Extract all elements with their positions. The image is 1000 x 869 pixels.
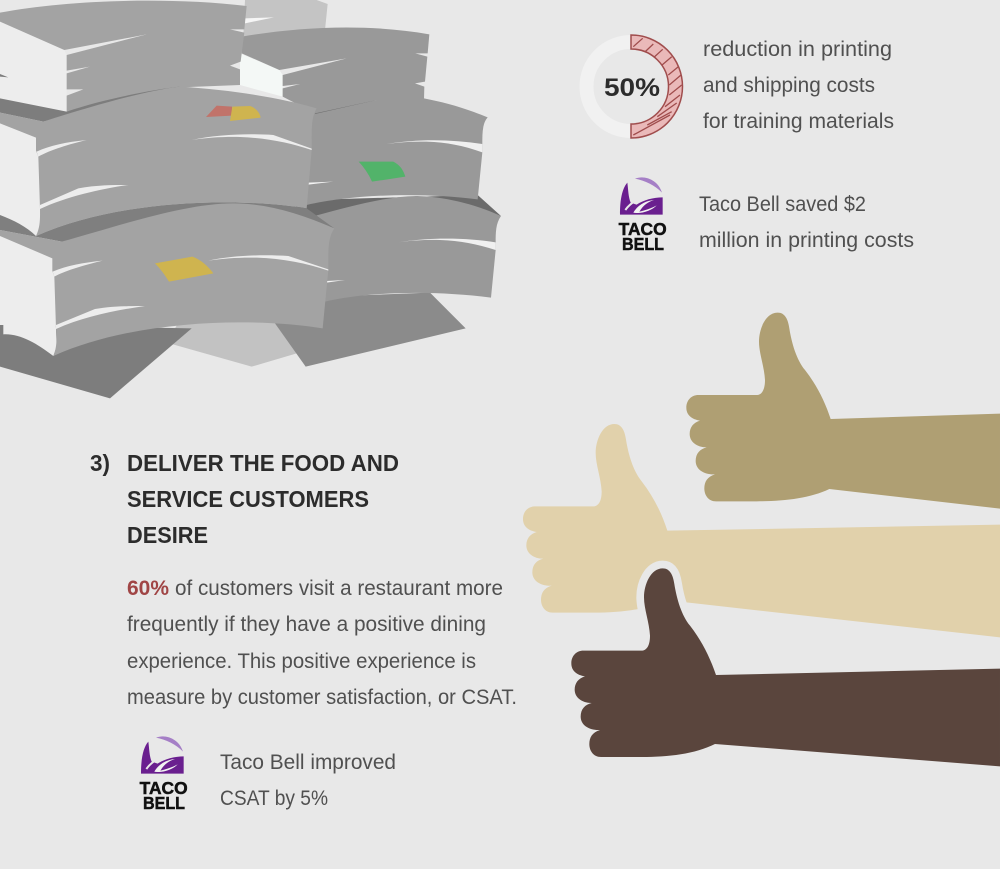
- text: reduction in printing: and shipping costs: [703, 73, 875, 97]
- text: Taco Bell improved CSAT: Taco Bell improved: [220, 750, 396, 774]
- loose sheets under the stacks: [0, 0, 466, 398]
- body text: of customers visit a restaurant more: [175, 576, 503, 600]
- sticky tabs: [155, 106, 405, 282]
- body text: frequently if they have a positive dining: [127, 612, 486, 636]
- body text: [127, 576, 517, 709]
- donut chart: 50%: [586, 35, 682, 138]
- icon: Taco Bell logo: [619, 177, 667, 254]
- text: reduction in printing: [703, 37, 894, 133]
- illustration: stacks of paper: [0, 0, 501, 398]
- hand: brown: [571, 568, 1000, 766]
- text: Taco Bell saved $2 million: million in printing costs: [699, 228, 914, 252]
- icon: Taco Bell logo: TACO: [619, 219, 667, 239]
- icon: Taco Bell logo: [140, 736, 188, 813]
- icon: Taco Bell logo: BELL: [622, 234, 664, 254]
- donut value: 50%: [604, 74, 660, 102]
- icon: Taco Bell logo: TACO: [140, 778, 188, 798]
- heading: section 3: [90, 450, 399, 548]
- text: Taco Bell saved $2 million: Taco Bell saved $2: [699, 192, 866, 216]
- text: reduction in printing: reduction in printing: [703, 37, 892, 61]
- heading: section 3: DELIVER THE FOOD AND: [127, 450, 399, 476]
- body text: 60%: [127, 576, 169, 600]
- right paper stacks: [240, 27, 501, 302]
- hand: tan: [686, 313, 1000, 509]
- text: reduction in printing: for training materials: [703, 109, 894, 133]
- icon: Taco Bell logo: BELL: [143, 793, 185, 813]
- hand: cream: [523, 424, 1000, 637]
- illustration: thumbs up hands: [523, 313, 1000, 766]
- text: Taco Bell saved $2 million: [699, 192, 914, 252]
- heading: section 3: DESIRE: [127, 522, 208, 548]
- left paper stacks: [0, 1, 334, 356]
- text: Taco Bell improved CSAT: CSAT by 5%: [220, 786, 328, 810]
- body text: measure by customer satisfaction, or CSAT.: [127, 685, 517, 709]
- body text: experience. This positive experience is: [127, 649, 476, 673]
- heading: section 3: 3): [90, 450, 110, 476]
- text: Taco Bell improved CSAT: [220, 750, 396, 810]
- heading: section 3: SERVICE CUSTOMERS: [127, 486, 369, 512]
